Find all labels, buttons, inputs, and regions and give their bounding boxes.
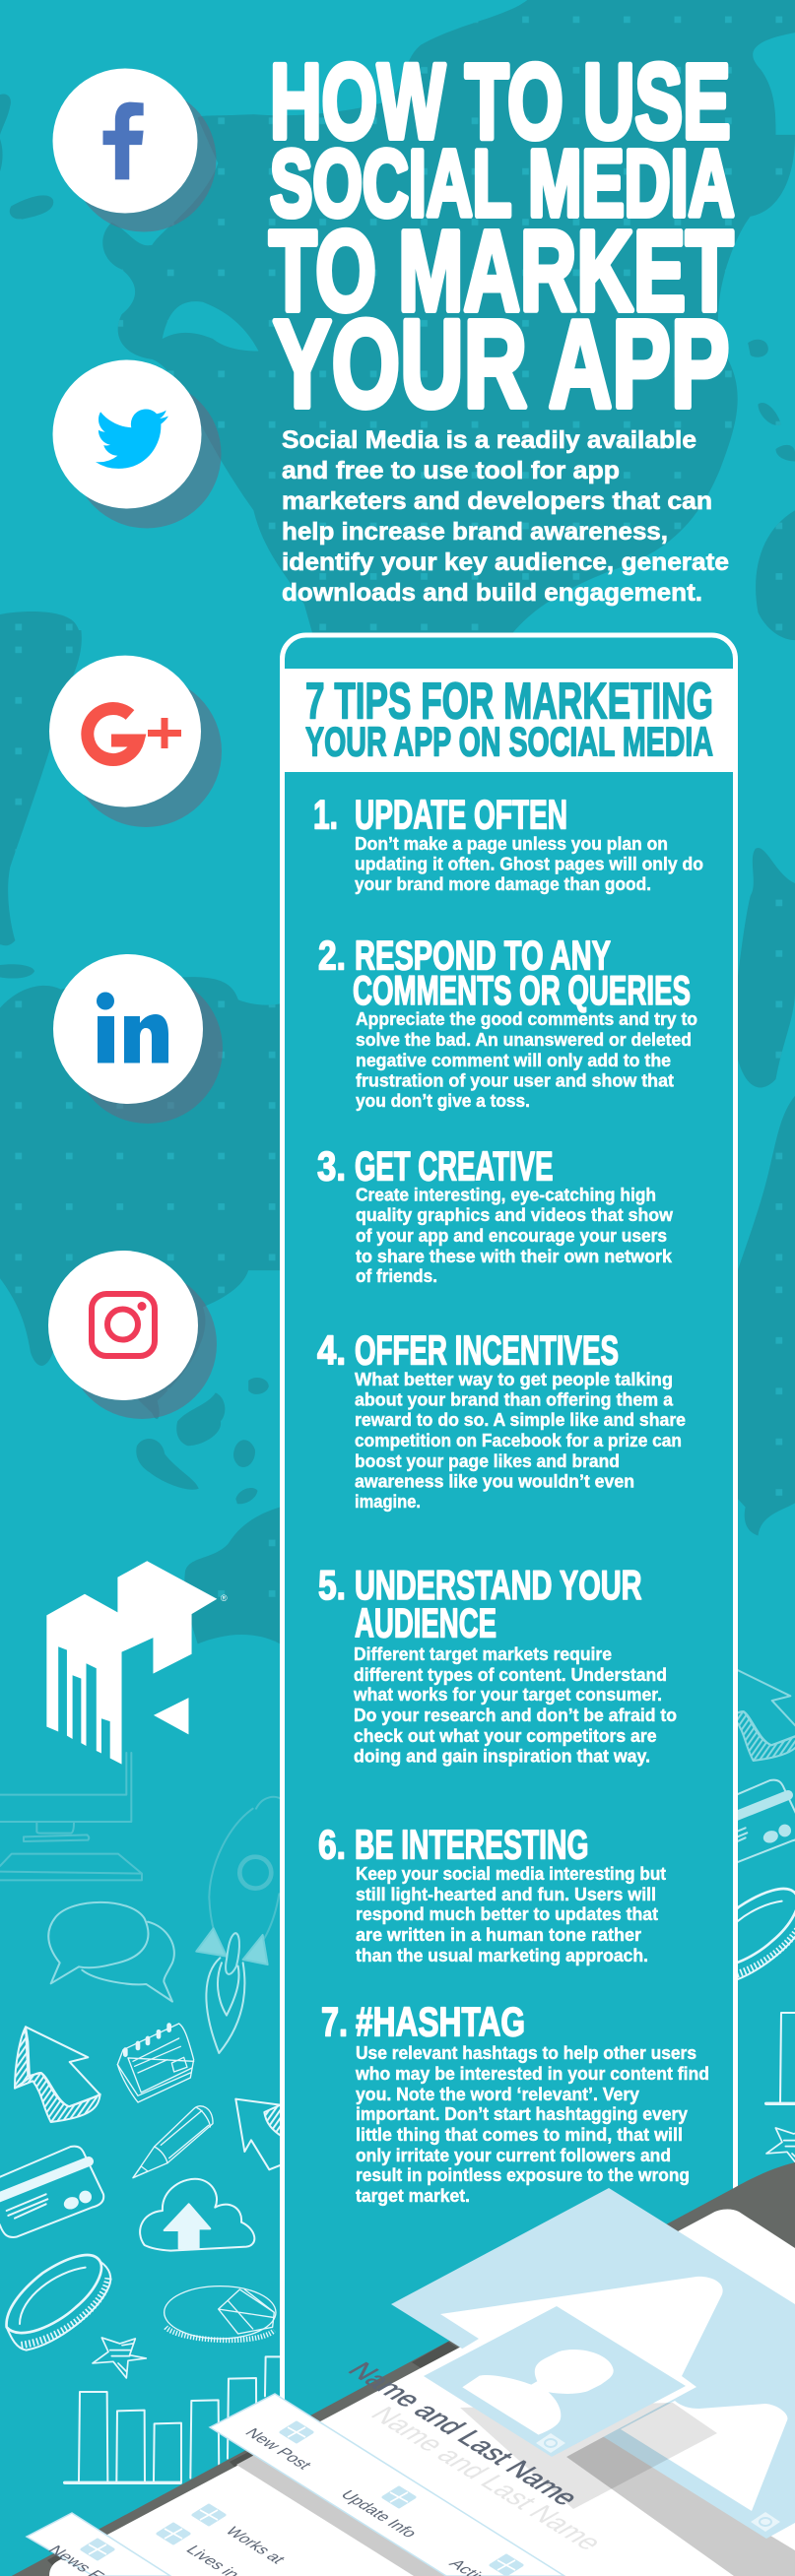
tip 7 bbox=[321, 1999, 709, 2206]
tip 3: Create interesting, eye-catching high bbox=[356, 1186, 656, 1205]
tip 5: Different target markets require bbox=[354, 1644, 612, 1664]
tip 7: only irritate your current followers and bbox=[356, 2146, 671, 2165]
tip 4: competition on Facebook for a prize can bbox=[355, 1431, 682, 1450]
tip 4: imagine. bbox=[355, 1492, 421, 1512]
avatar bbox=[424, 2306, 686, 2457]
tip 7: target market. bbox=[356, 2186, 470, 2206]
doodle: cursor arrow bbox=[15, 2027, 100, 2122]
intro paragraph bbox=[282, 426, 729, 607]
tip 3 bbox=[317, 1142, 674, 1286]
tip 4: 4. bbox=[317, 1327, 346, 1373]
tip 2: you don’t give a toss. bbox=[356, 1091, 530, 1111]
tip 7: result in pointless exposure to the wrong bbox=[356, 2165, 690, 2185]
phone screen bbox=[49, 2210, 795, 2576]
cover camera icon bbox=[751, 2512, 780, 2532]
tip 5: what works for your target consumer. bbox=[353, 1685, 662, 1705]
tip 7: Use relevant hashtags to help other users bbox=[356, 2043, 696, 2063]
doodle: pencil bbox=[133, 2106, 213, 2178]
logo: ® bbox=[221, 1593, 228, 1603]
doodle: calendar bbox=[117, 2024, 194, 2102]
tip 5: doing and gain inspiration that way. bbox=[354, 1747, 650, 1767]
tip 2: RESPOND TO ANY bbox=[355, 932, 611, 979]
panel: tips bbox=[282, 635, 735, 2576]
cover photo bbox=[391, 2188, 795, 2539]
panel heading band bbox=[285, 669, 733, 772]
icon: google plus bbox=[49, 656, 222, 827]
name text dark: Name and Last Name bbox=[341, 2358, 586, 2510]
tip 3: 3. bbox=[317, 1142, 346, 1190]
tip 2 bbox=[318, 932, 697, 1111]
tip 4: reward to do so. A simple like and share bbox=[355, 1410, 686, 1430]
doodle: second cursor arrow bbox=[235, 2099, 286, 2169]
tip 1: updating it often. Ghost pages will only do bbox=[355, 855, 703, 874]
tip 1: 1. bbox=[313, 792, 338, 837]
world map backdrop bbox=[0, 0, 795, 1643]
tip 1: your brand more damage than good. bbox=[355, 874, 651, 894]
intro paragraph: and free to use tool for app bbox=[282, 457, 620, 484]
tip 4: OFFER INCENTIVES bbox=[355, 1327, 619, 1373]
tip 7: who may be interested in your content find bbox=[355, 2064, 709, 2084]
tip 6 bbox=[318, 1822, 666, 1965]
tip 2: frustration of your user and show that bbox=[356, 1071, 674, 1091]
name text light: Name and Last Name bbox=[364, 2403, 610, 2554]
tip 5 bbox=[318, 1562, 677, 1767]
tip 5: AUDIENCE bbox=[355, 1599, 497, 1646]
intro paragraph: identify your key audience, generate bbox=[282, 548, 729, 576]
tip 2: Appreciate the good comments and try to bbox=[356, 1009, 697, 1029]
tip 2: 2. bbox=[318, 932, 346, 979]
menu bar: new post, update info, activity: Update Info bbox=[337, 2488, 422, 2540]
tip 5: UNDERSTAND YOUR bbox=[355, 1562, 642, 1608]
intro paragraph: Social Media is a readily available bbox=[282, 426, 696, 454]
tip 1: Don’t make a page unless you plan on bbox=[355, 834, 668, 854]
tip 1 bbox=[313, 792, 703, 894]
tip 6: still light-hearted and fun. Users will bbox=[356, 1885, 656, 1904]
tip 5: check out what your competitors are bbox=[354, 1726, 656, 1746]
tip 6: Keep your social media interesting but bbox=[356, 1864, 666, 1884]
grey bands bbox=[236, 2435, 795, 2576]
phone shadows bbox=[47, 2342, 463, 2566]
tip 7: important. Don’t start hashtagging every bbox=[356, 2104, 688, 2124]
tip 5: 5. bbox=[318, 1562, 346, 1608]
intro paragraph: downloads and build engagement. bbox=[282, 579, 702, 607]
phone body bbox=[0, 2162, 795, 2576]
tip 6: than the usual marketing approach. bbox=[356, 1946, 648, 1965]
tip 6: 6. bbox=[318, 1822, 346, 1867]
isometric phone profile mockup bbox=[0, 2162, 795, 2576]
tip 3: of friends. bbox=[356, 1266, 437, 1286]
menu bar: new post, update info, activity bbox=[210, 2394, 564, 2576]
doodle: monitor and keyboard bbox=[0, 1753, 142, 1880]
tip 5: Do your research and don’t be afraid to bbox=[354, 1706, 677, 1725]
intro paragraph: marketers and developers that can bbox=[282, 487, 712, 515]
tip 7: #HASHTAG bbox=[356, 1999, 525, 2044]
doodle: star bbox=[93, 2338, 146, 2378]
tip 1: UPDATE OFTEN bbox=[355, 792, 567, 837]
tip 3: to share these with their own network bbox=[356, 1247, 673, 1266]
doodle: speech bubbles bbox=[48, 1902, 174, 2002]
doodle: coin bbox=[7, 2255, 110, 2351]
doodles: right margin bbox=[690, 1665, 795, 2168]
intro paragraph: help increase brand awareness, bbox=[282, 518, 668, 546]
avatar camera icon bbox=[536, 2433, 565, 2453]
tip 3: quality graphics and videos that show bbox=[356, 1205, 674, 1225]
logo bbox=[46, 1561, 228, 1765]
menu bar: new post, update info, activity: New Post bbox=[241, 2426, 316, 2472]
tip 6: BE INTERESTING bbox=[355, 1822, 589, 1867]
doodle: rocket bbox=[196, 1797, 281, 2053]
details: works at, lives in bbox=[158, 2505, 290, 2576]
doodle: cloud upload bbox=[140, 2179, 254, 2251]
tip 4: about your brand than offering them a bbox=[355, 1390, 674, 1410]
panel frame bbox=[282, 635, 735, 2576]
icon: twitter bbox=[53, 360, 221, 528]
doodle: pie chart bbox=[165, 2286, 276, 2341]
title bbox=[269, 41, 735, 433]
tip 3: GET CREATIVE bbox=[355, 1142, 554, 1190]
tip 4: What better way to get people talking bbox=[355, 1370, 673, 1389]
tip 4 bbox=[317, 1327, 686, 1512]
tip 5: different types of content. Understand bbox=[354, 1665, 667, 1685]
icon: instagram bbox=[48, 1251, 217, 1419]
tip 6: are written in a human tone rather bbox=[356, 1925, 641, 1945]
icon: facebook bbox=[53, 69, 217, 232]
tip 4: awareness like you wouldn’t even bbox=[355, 1471, 634, 1491]
tip 4: boost your page likes and brand bbox=[355, 1451, 620, 1471]
name shadow block bbox=[460, 2403, 717, 2509]
tip 2: negative comment will only add to the bbox=[356, 1051, 671, 1070]
tip 7: little thing that comes to mind, that will bbox=[356, 2125, 683, 2145]
tip 7: 7. bbox=[321, 1999, 348, 2044]
icon: linkedin bbox=[53, 954, 223, 1124]
tip 3: of your app and encourage your users bbox=[356, 1226, 667, 1246]
menu bar: news feed bbox=[27, 2513, 170, 2576]
tip 6: respond much better to updates that bbox=[356, 1904, 658, 1924]
details: works at, lives in: Works at bbox=[222, 2525, 290, 2566]
tip 7: you. Note the word ‘relevant’. Very bbox=[356, 2085, 639, 2104]
tip 2: solve the bad. An unanswered or deleted bbox=[356, 1030, 692, 1050]
doodle: bar chart bbox=[65, 2356, 283, 2482]
doodle: credit card bbox=[0, 2147, 103, 2237]
